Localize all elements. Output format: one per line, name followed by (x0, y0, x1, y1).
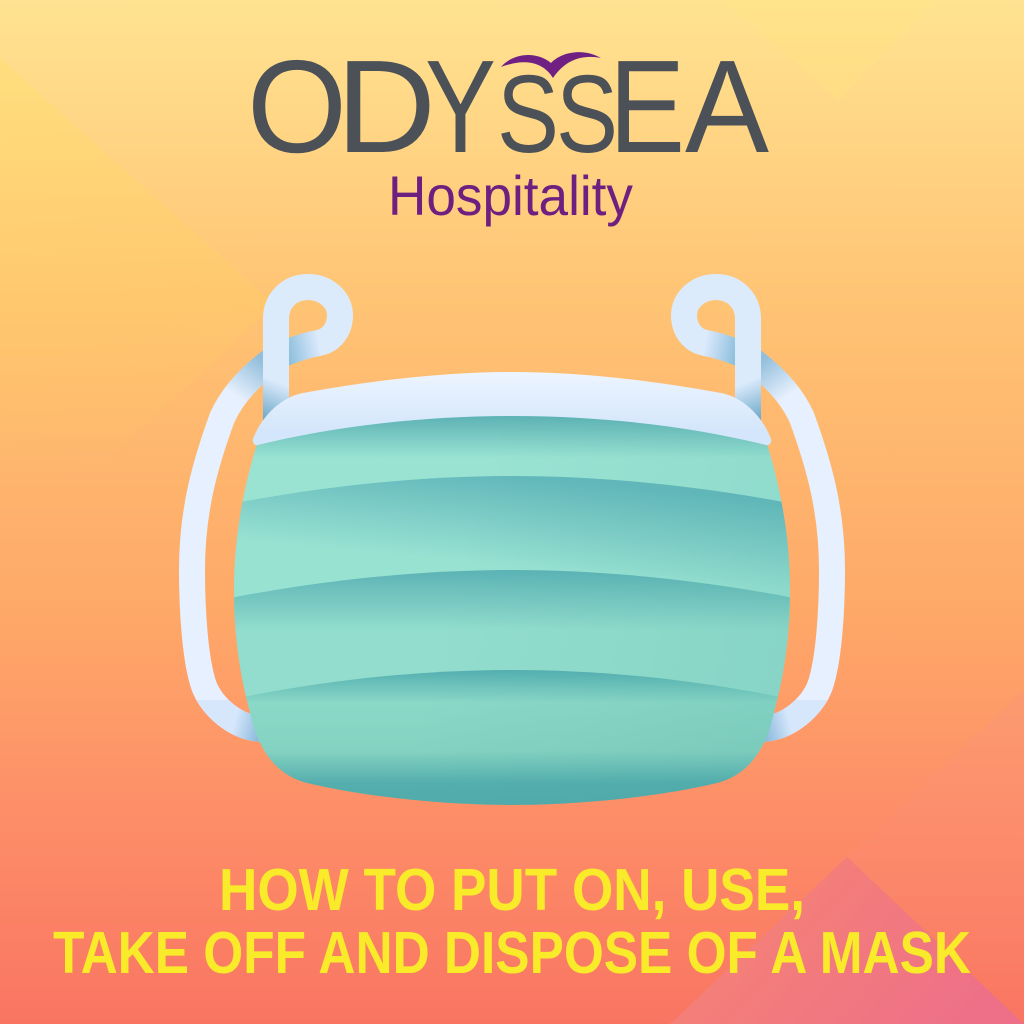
left ear strap (192, 343, 319, 729)
wordmark: S (556, 53, 618, 176)
mask top band (253, 372, 771, 445)
mask body (234, 416, 790, 805)
wordmark (247, 33, 769, 180)
wordmark: S (497, 53, 559, 176)
title (53, 857, 971, 986)
tagline: Hospitality (388, 164, 633, 227)
right ear strap (705, 343, 832, 729)
icon: seagull (501, 52, 601, 78)
wordmark: D (336, 33, 436, 180)
right loop (684, 287, 748, 425)
title line 1: HOW TO PUT ON, USE, (219, 857, 805, 923)
wordmark: A (685, 33, 769, 180)
wordmark: Y (425, 33, 496, 180)
illustration: surgical mask (192, 287, 832, 810)
wordmark: O (247, 33, 347, 180)
logo: Odyssea Hospitality (247, 33, 769, 227)
left loop (276, 287, 340, 425)
wordmark: E (609, 33, 685, 180)
